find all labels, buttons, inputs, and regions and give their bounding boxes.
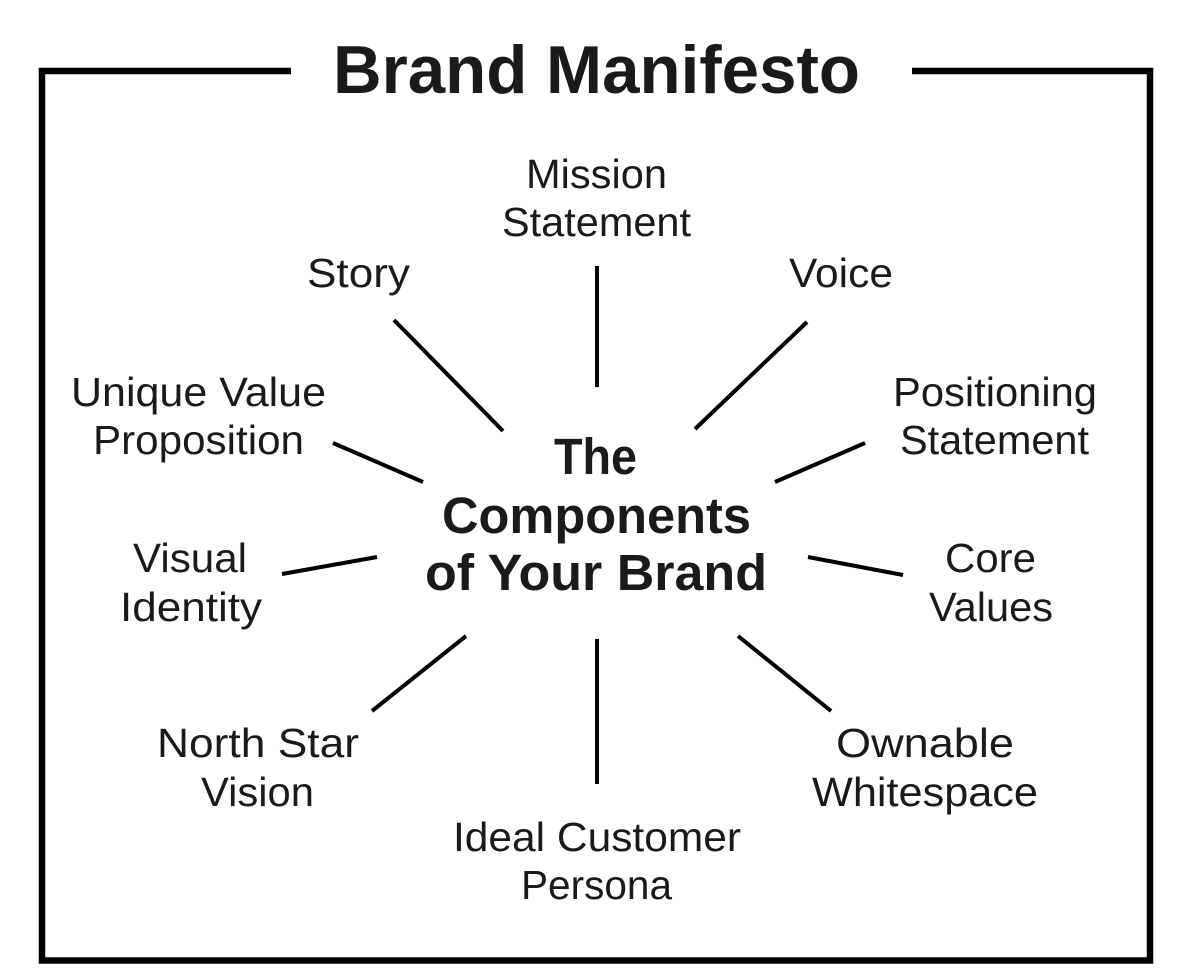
label: core values: Values — [929, 584, 1053, 630]
center heading: The — [554, 428, 637, 485]
label: north star vision: Vision — [201, 769, 314, 815]
label: north star vision — [157, 720, 359, 815]
center heading — [425, 428, 767, 601]
label: core values — [929, 535, 1053, 630]
center heading: Components — [442, 487, 751, 544]
label: mission statement: Statement — [502, 199, 692, 245]
label: positioning statement — [893, 369, 1097, 463]
label: mission statement — [502, 151, 692, 245]
label: north star vision: North Star — [157, 720, 359, 766]
label: unique value proposition: Proposition — [93, 417, 304, 463]
label: ownable whitespace — [812, 720, 1038, 815]
label: unique value proposition: Unique Value — [71, 369, 326, 415]
label: ideal customer persona: Ideal Customer — [453, 814, 741, 860]
label: visual identity: Identity — [120, 584, 263, 630]
label: story: Story — [307, 250, 411, 296]
label: ideal customer persona — [453, 814, 741, 908]
label: mission statement: Mission — [526, 151, 667, 197]
label: visual identity — [120, 535, 263, 630]
label: ownable whitespace: Ownable — [836, 720, 1014, 766]
connector lines — [282, 266, 903, 784]
label: core values: Core — [945, 535, 1036, 581]
label: unique value proposition — [71, 369, 326, 463]
label: positioning statement: Positioning — [893, 369, 1097, 415]
title: Brand Manifesto — [333, 32, 860, 108]
center heading: of Your Brand — [425, 544, 767, 601]
label: ownable whitespace: Whitespace — [812, 769, 1038, 815]
label: positioning statement: Statement — [900, 417, 1090, 463]
label: visual identity: Visual — [133, 535, 247, 581]
label: ideal customer persona: Persona — [521, 862, 672, 908]
label: voice: Voice — [789, 250, 893, 296]
